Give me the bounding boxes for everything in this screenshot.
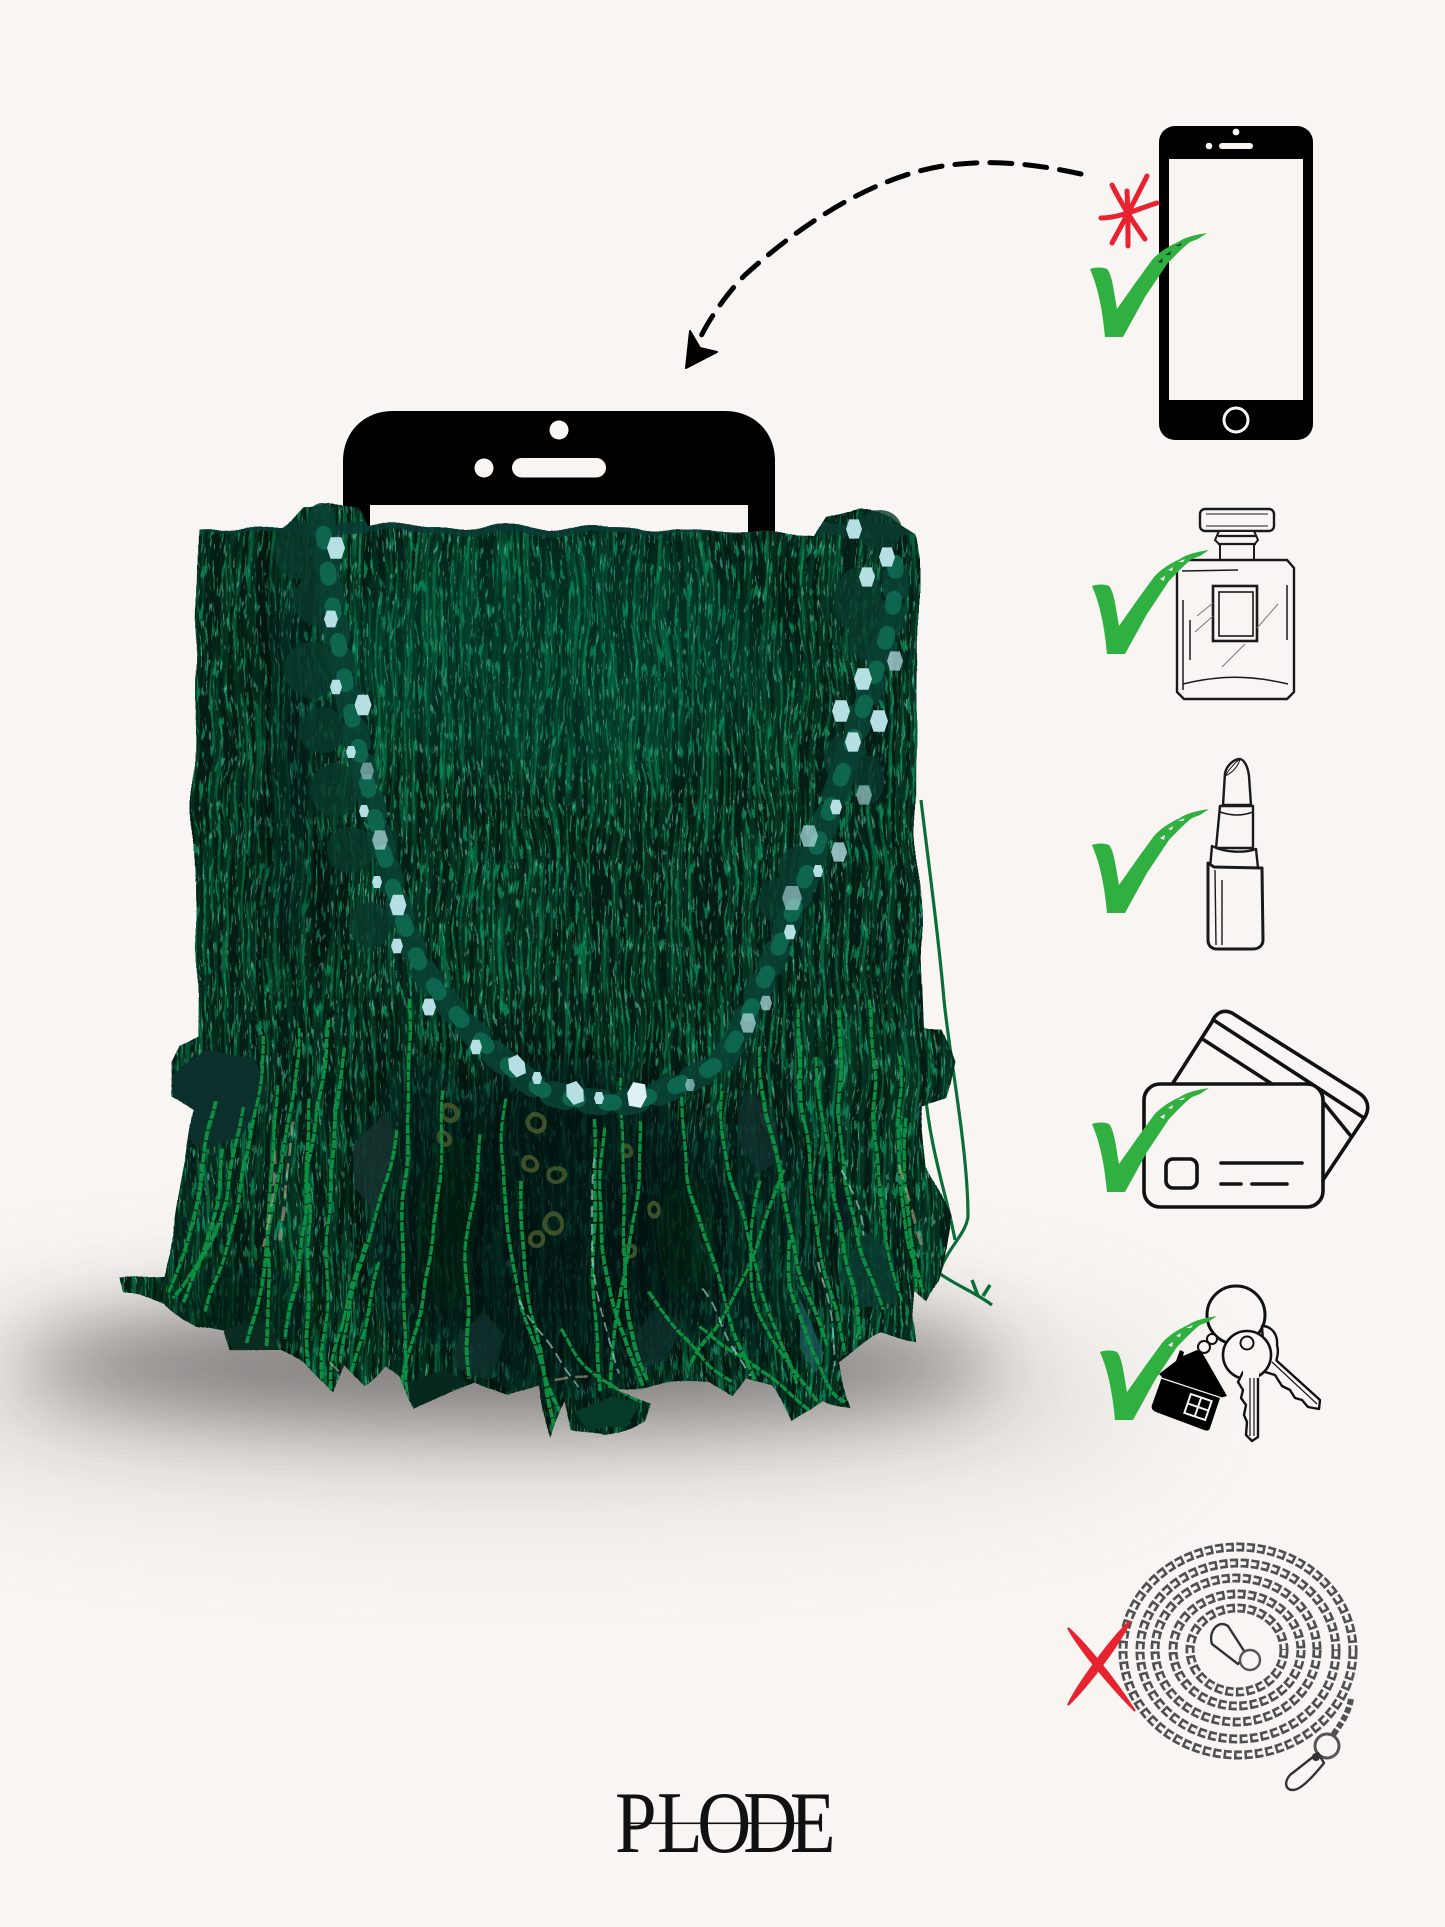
beaded chain handle — [273, 510, 903, 1109]
large dark sequins — [170, 1045, 895, 1432]
olive sequin rings — [439, 1103, 661, 1256]
dark octagon beads left and right of chain — [273, 510, 902, 948]
bag body texture — [120, 480, 1000, 1460]
beige gaps between strands — [265, 1120, 925, 1378]
item: keys — [1100, 1286, 1320, 1441]
pale bead facets — [324, 519, 903, 1109]
red asterisk — [1101, 176, 1157, 246]
large phone peeking out of bag — [343, 411, 775, 545]
green check — [1090, 233, 1207, 337]
item: credit cards — [1092, 1011, 1368, 1207]
brand logo — [615, 1773, 836, 1871]
small phone icon — [1159, 126, 1313, 440]
item: phone with red asterisk — [1090, 126, 1313, 440]
coiled chain icon — [1123, 1547, 1353, 1790]
item: perfume — [1092, 509, 1294, 699]
green check — [1092, 1088, 1209, 1192]
cards icon — [1144, 1011, 1368, 1207]
perfume bottle icon — [1177, 509, 1294, 699]
brand logo: P — [615, 1773, 657, 1871]
blue-white glints in lower strands — [520, 1160, 864, 1385]
lipstick icon — [1208, 759, 1263, 949]
red cross — [1068, 1621, 1135, 1711]
lower bright green strands — [170, 1000, 925, 1430]
dashed curved arrow into bag — [686, 163, 1081, 368]
beaded green fringe bag — [120, 480, 1000, 1460]
brand logo: L — [657, 1773, 703, 1871]
item: chain strap excluded — [1068, 1547, 1353, 1790]
item: lipstick — [1092, 759, 1263, 949]
brand logo: O — [697, 1773, 751, 1871]
green check — [1092, 550, 1209, 654]
green check — [1100, 1316, 1217, 1420]
drop shadow under bag — [0, 1300, 1160, 1500]
keyring icon — [1152, 1286, 1320, 1441]
brand logo: E — [790, 1773, 836, 1871]
brand logo: D — [743, 1773, 797, 1871]
thin loose strands at right side — [921, 800, 992, 1305]
green check — [1092, 809, 1209, 913]
